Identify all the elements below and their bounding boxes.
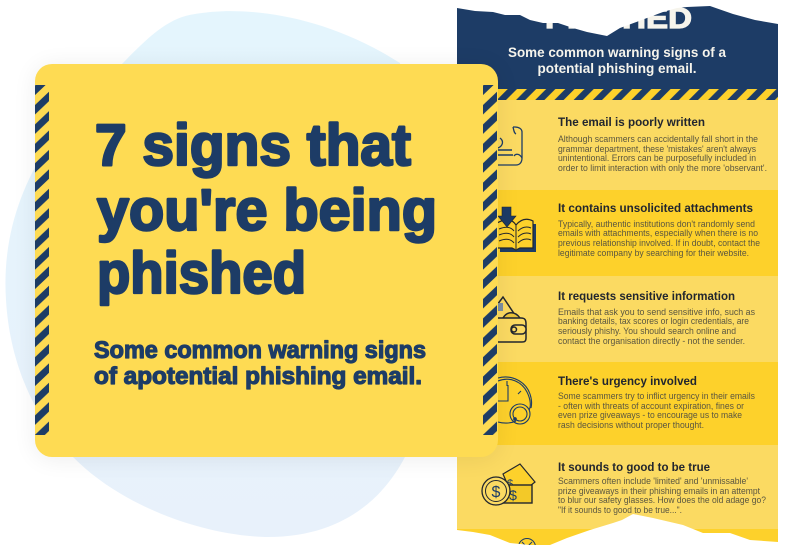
icon: clock with magnifier bbox=[498, 377, 532, 424]
background blob bbox=[5, 11, 420, 537]
sign 5 text: It sounds to good to be true bbox=[558, 460, 710, 474]
right hazard stripe bbox=[483, 85, 497, 435]
card subtitle: of apotential phishing email. bbox=[94, 363, 422, 390]
card subtitle: Some common warning signs bbox=[94, 337, 426, 364]
card shadow bbox=[35, 66, 498, 459]
sign 1 text bbox=[558, 115, 767, 173]
section backgrounds bbox=[457, 100, 778, 549]
card title: 7 signs that bbox=[95, 113, 411, 178]
sign 3 text: contact the organisation directly - not the sender. bbox=[558, 336, 745, 346]
hazard stripe bar bbox=[498, 89, 778, 100]
sign 3 text: It requests sensitive information bbox=[558, 289, 735, 303]
main yellow card bbox=[35, 64, 498, 459]
icon: dollar coin and banknotes: $ bbox=[509, 487, 517, 503]
sign 2 text: previous relationship involved. If in doubt, contact the bbox=[558, 238, 760, 248]
sign 1 text: grammar department, these 'mistakes' aren't always bbox=[558, 144, 757, 154]
icon: dollar coin and banknotes bbox=[482, 464, 535, 505]
sign 2 text bbox=[558, 201, 760, 258]
sign 4 text: - often with threats of account expiration, fines or bbox=[558, 401, 744, 411]
navy header bbox=[457, 5, 778, 90]
sign 1 text: order to limit interaction with only the more 'observant'. bbox=[558, 163, 767, 173]
sign 4 text bbox=[558, 374, 756, 430]
sign 5 text bbox=[558, 460, 766, 515]
sign 2 text: legitimate company by searching for their website. bbox=[558, 248, 749, 258]
torn bottom edge bbox=[450, 514, 785, 552]
sign 2 text: emails with attachments, especially when there is no bbox=[558, 228, 758, 238]
sign 1 text: unintentional. Errors can be purposefully included in bbox=[558, 153, 756, 163]
icon: open book with download arrow bbox=[497, 207, 536, 252]
sign 4 text: rash decisions without proper thought. bbox=[558, 420, 704, 430]
sign 5 text: "If it sounds to good to be true...". bbox=[558, 505, 682, 515]
sign 5 text: prize giveaways in their phishing emails in an attempt bbox=[558, 486, 761, 496]
left hazard stripe bbox=[35, 85, 49, 435]
icon: dollar coin and banknotes: $ bbox=[492, 484, 501, 501]
sign 2 text: It contains unsolicited attachments bbox=[558, 201, 753, 215]
sign 4 text: even prize giveaways - to encourage us to make bbox=[558, 410, 742, 420]
card subtitle bbox=[94, 337, 426, 390]
header subtitle: Some common warning signs of a bbox=[508, 45, 726, 60]
sign 3 text: banking details, tax scores or login credentials, are bbox=[558, 316, 749, 326]
sign 3 text: Emails that ask you to send sensitive info, such as bbox=[558, 307, 756, 317]
icon: wallet with cards bbox=[497, 297, 526, 342]
icon: footer circle bbox=[518, 538, 536, 552]
infographic panel bbox=[450, 0, 785, 552]
sign 3 text: seriously phishy. You should search online and bbox=[558, 326, 736, 336]
card title: you're being bbox=[97, 178, 437, 243]
icon: dollar coin and banknotes: $ bbox=[507, 478, 513, 490]
sign 5 text: to blur our safety glasses. How does the old adage go? bbox=[558, 495, 766, 505]
sign 5 text: Scammers often include 'limited' and 'unmissable' bbox=[558, 476, 748, 486]
sign 4 text: Some scammers try to inflict urgency in their emails bbox=[558, 391, 756, 401]
icon: scroll document bbox=[497, 127, 522, 165]
sign 4 text: There's urgency involved bbox=[558, 374, 697, 388]
sign 3 text bbox=[558, 289, 756, 346]
header subtitle bbox=[508, 45, 726, 76]
card body bbox=[35, 64, 498, 457]
torn top edge bbox=[450, 0, 785, 36]
sign 1 text: Although scammers can accidentally fall short in the bbox=[558, 134, 758, 144]
sign 2 text: Typically, authentic institutions don't randomly send bbox=[558, 219, 755, 229]
header cut-off title: PHISHED bbox=[545, 3, 692, 35]
header subtitle: potential phishing email. bbox=[538, 61, 696, 76]
card title: phished bbox=[97, 241, 306, 306]
sign 1 text: The email is poorly written bbox=[558, 115, 705, 129]
card title bbox=[95, 113, 437, 306]
